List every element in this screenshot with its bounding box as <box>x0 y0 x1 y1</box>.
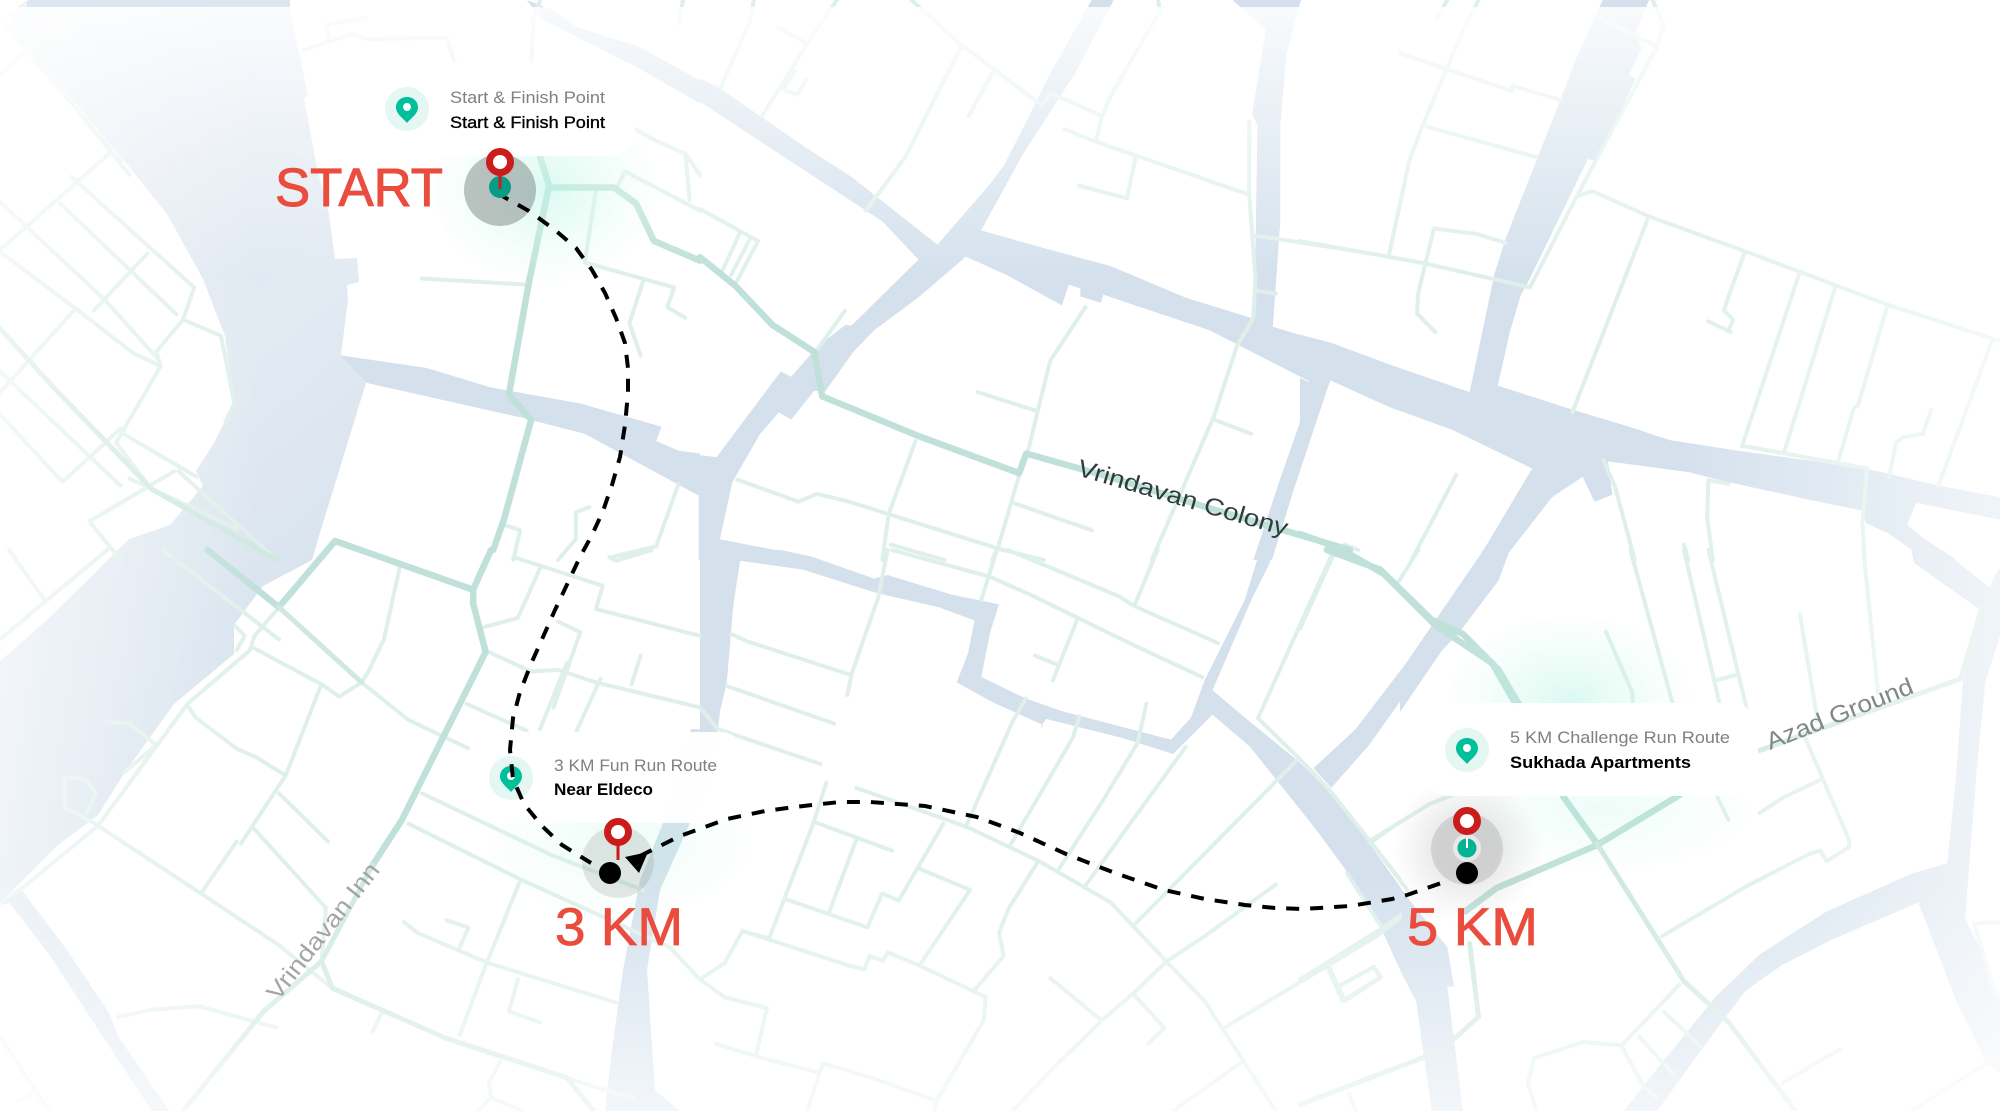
minor streets north centre <box>700 0 1350 560</box>
streets south centre <box>700 550 1400 958</box>
minor streets south west <box>0 550 700 1111</box>
icon: 3 km location pin <box>489 756 533 800</box>
marker halo: 5 km <box>1431 813 1503 885</box>
icon: 5 km location pin <box>1445 728 1489 772</box>
card: 3 km fun run route <box>468 732 746 823</box>
minor streets south centre <box>700 550 1400 1111</box>
card subtitle: 5 km: Sukhada Apartments <box>1510 753 1691 772</box>
streets west <box>341 0 700 496</box>
label: START: START <box>275 158 443 218</box>
minor streets north east <box>1300 0 2000 560</box>
marker halo: 3 km <box>582 826 654 898</box>
icon: start location pin <box>385 87 429 131</box>
marker: 3 km <box>599 822 628 884</box>
label: 5 KM: 5 KM <box>1407 898 1538 957</box>
card: 5 km challenge run route <box>1423 703 1758 796</box>
street label: Vrindavan Colony: Vrindavan Colony <box>1074 455 1291 542</box>
card subtitle: 3 km: Near Eldeco <box>554 780 653 799</box>
card title: start: Start & Finish Point <box>450 88 605 107</box>
card: start and finish point <box>363 63 635 156</box>
street label: Vrindavan Inn: Vrindavan Inn <box>261 857 386 1006</box>
card subtitle: start: Start & Finish Point <box>450 113 605 132</box>
dashed route: start to 3 km <box>500 190 628 863</box>
arrowhead <box>625 852 648 873</box>
mint and grey glows around the markers <box>425 90 1770 925</box>
marker: 5 km <box>1453 810 1481 884</box>
streets north centre <box>699 0 1350 560</box>
marker: start <box>489 152 511 198</box>
card title: 5 km: 5 KM Challenge Run Route <box>1510 728 1730 747</box>
streets south east <box>1300 550 2000 1111</box>
label: 3 KM: 3 KM <box>555 898 683 957</box>
river <box>0 0 366 902</box>
dashed route: 3 km to 5 km <box>640 802 1447 909</box>
card title: 3 km: 3 KM Fun Run Route <box>554 756 717 775</box>
street label: Azad Ground: Azad Ground <box>1762 673 1917 756</box>
minor streets south east <box>1300 550 2000 1111</box>
marker halo: start <box>464 154 536 226</box>
streets north east <box>1300 0 2000 560</box>
minor streets north west <box>0 0 700 560</box>
